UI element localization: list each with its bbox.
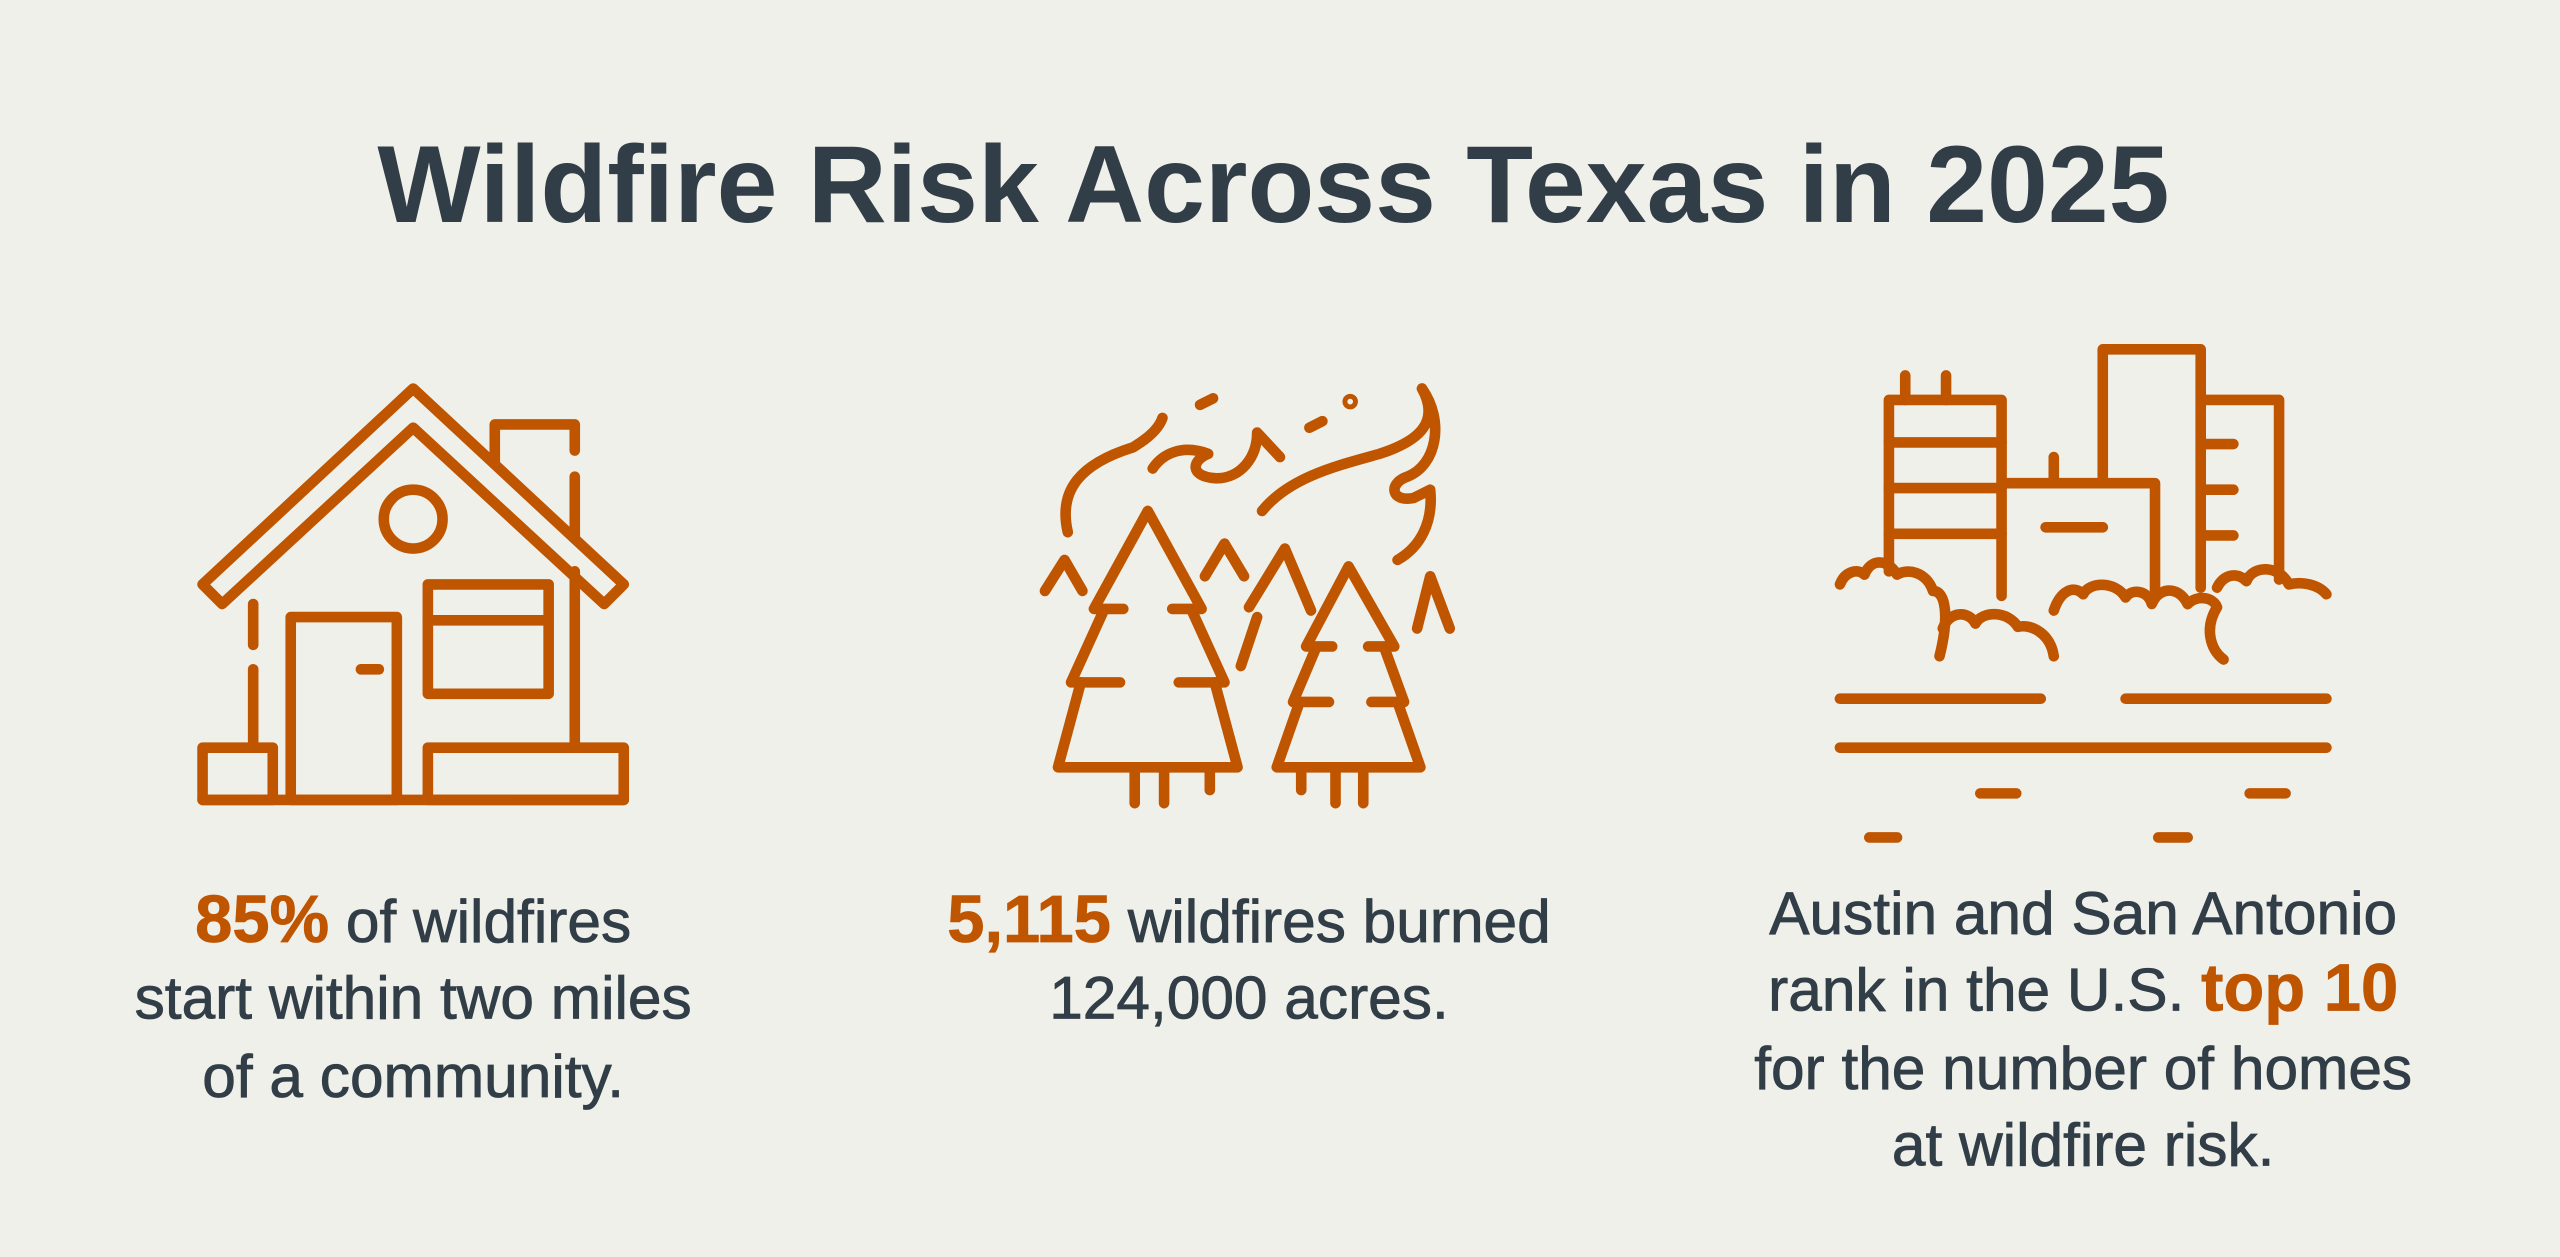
icon: burning forest	[1045, 389, 1450, 803]
text: acres stat: 124,000 acres.	[1049, 964, 1449, 1032]
text: community stat: 85% of wildfires	[195, 882, 631, 957]
title: Wildfire Risk Across Texas in 2025	[377, 124, 2170, 246]
text: acres stat	[947, 882, 1551, 1032]
text: cities stat: at wildfire risk.	[1892, 1111, 2274, 1179]
text: community stat: start within two miles	[135, 964, 692, 1032]
text: community stat	[135, 882, 692, 1110]
icon: house	[203, 389, 624, 800]
text: cities stat: for the number of homes	[1754, 1034, 2412, 1102]
text: community stat: of a community.	[202, 1042, 624, 1110]
text: cities stat: rank in the U.S. top 10	[1768, 950, 2398, 1025]
text: cities stat: Austin and San Antonio	[1769, 879, 2397, 947]
icon: city skyline	[1840, 349, 2326, 837]
text: acres stat: 5,115 wildfires burned	[947, 882, 1551, 957]
text: cities stat	[1754, 879, 2412, 1179]
